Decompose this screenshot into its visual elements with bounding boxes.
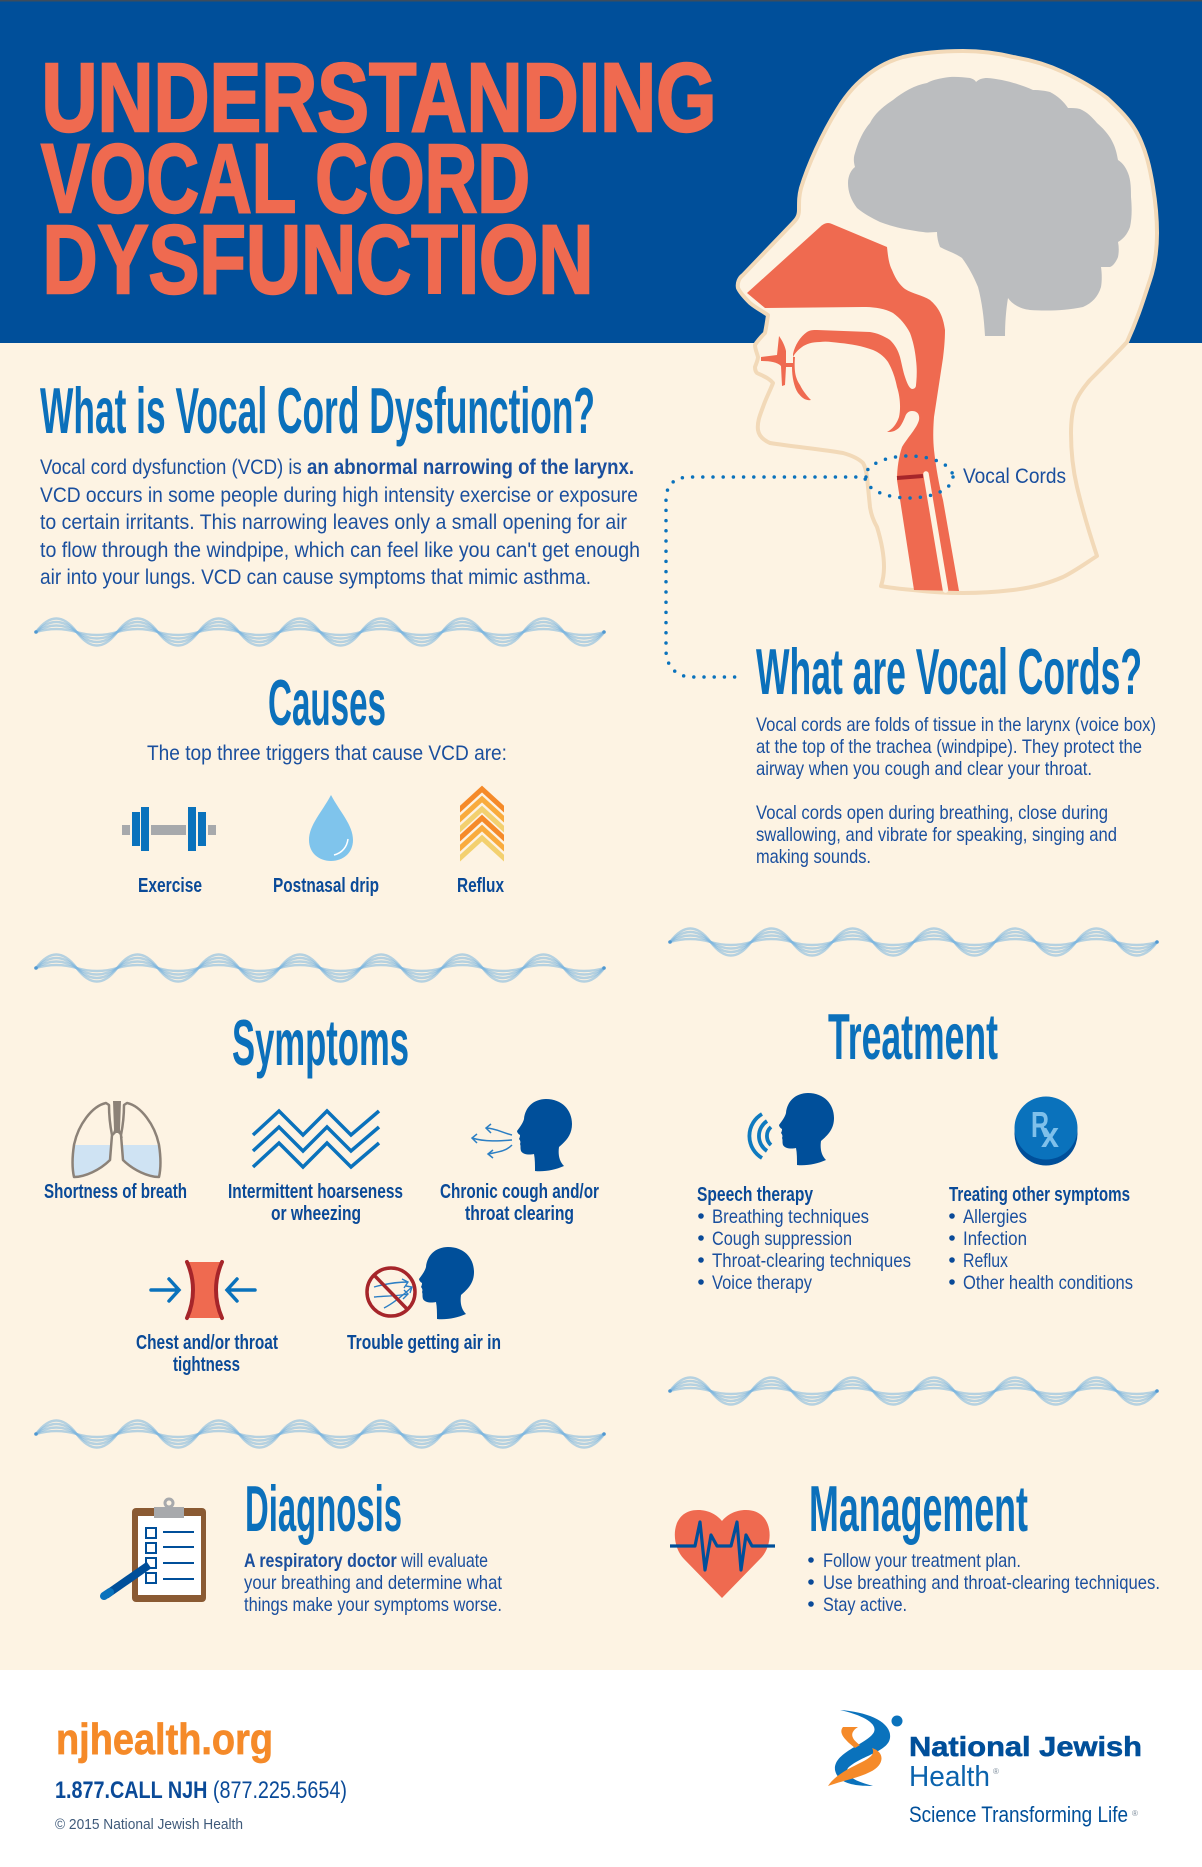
- label: chest tightness: tightness: [173, 1354, 240, 1376]
- paragraph: Vocal cord dysfunction (VCD) is an abnormal narrowing of the larynx.: [40, 456, 634, 479]
- list: speech therapy: Voice therapy: [712, 1272, 812, 1294]
- panel: symptoms: [44, 1006, 599, 1376]
- text: things make your symptoms worse.: [244, 1594, 502, 1616]
- paragraph 1: [756, 714, 1156, 780]
- paragraph 2: making sounds.: [756, 846, 871, 868]
- phone: 1.877.CALL NJH (877.225.5654): [55, 1777, 347, 1804]
- paragraph 2: Vocal cords open during breathing, close during: [756, 802, 1108, 824]
- icon: drop: [309, 795, 353, 861]
- label: hoarseness: [228, 1181, 403, 1225]
- list: treating other symptoms: Infection: [963, 1228, 1027, 1250]
- label: reflux: Reflux: [457, 875, 504, 897]
- teeth and jaw: [761, 336, 811, 400]
- text: your breathing and determine what: [244, 1572, 502, 1594]
- logo: National Jewish Health: ®: [1132, 1809, 1138, 1818]
- list: treating other symptoms: Treating other symptoms: [949, 1184, 1130, 1206]
- panel: what are vocal cords: [756, 635, 1156, 868]
- heading: Causes: [268, 666, 386, 739]
- icon: rx pill: x: [1041, 1114, 1059, 1155]
- list: speech therapy: Cough suppression: [712, 1228, 852, 1250]
- paragraph: VCD occurs in some people during high intensity exercise or exposure: [40, 484, 638, 507]
- dotted connector: [666, 477, 866, 677]
- dotted highlight: [865, 456, 953, 498]
- icon: clipboard: [104, 1499, 206, 1602]
- title: [41, 43, 716, 314]
- label: exercise: Exercise: [138, 875, 202, 897]
- paragraph 1: at the top of the trachea (windpipe). They protect the: [756, 736, 1142, 758]
- paragraph: air into your lungs. VCD can cause symptoms that mimic asthma.: [40, 566, 591, 589]
- paragraph 2: [756, 802, 1117, 868]
- list: treating other symptoms: Allergies: [963, 1206, 1027, 1228]
- label: vocal cords: Vocal Cords: [963, 465, 1066, 488]
- heading: Management: [809, 1472, 1028, 1545]
- icon: rx pill: [1014, 1096, 1078, 1166]
- icon: zigzag waves: [253, 1111, 379, 1167]
- list: treating other symptoms: Reflux: [963, 1250, 1008, 1272]
- panel: what is VCD: [40, 374, 640, 589]
- vocal cord band: [897, 476, 923, 478]
- list: speech therapy: Throat-clearing techniques: [712, 1250, 911, 1272]
- logo: National Jewish Health: Science Transforming Life: [909, 1802, 1128, 1827]
- panel: diagnosis: [104, 1472, 502, 1616]
- panel: management: [670, 1472, 1160, 1616]
- logo: National Jewish Health: National Jewish: [909, 1731, 1142, 1762]
- panel: treatment: [697, 1000, 1133, 1294]
- footer: contact: [55, 1715, 347, 1833]
- label: hoarseness: or wheezing: [271, 1203, 361, 1225]
- paragraph: [40, 456, 640, 589]
- list: Stay active.: [823, 1594, 907, 1616]
- list: Follow your treatment plan.: [823, 1550, 1021, 1572]
- icon: speaking head: [749, 1093, 834, 1165]
- list: treating other symptoms: [949, 1184, 1133, 1294]
- heading: Diagnosis: [245, 1472, 402, 1545]
- header band: [0, 0, 1202, 343]
- paragraph: to flow through the windpipe, which can feel like you can't get enough: [40, 539, 640, 562]
- list: [808, 1550, 1160, 1616]
- copyright: © 2015 National Jewish Health: [55, 1816, 243, 1833]
- title: UNDERSTANDING: [42, 43, 716, 152]
- title: DYSFUNCTION: [42, 205, 594, 314]
- esophagus strip: [926, 474, 946, 590]
- heading: Symptoms: [232, 1006, 409, 1079]
- website: njhealth.org: [56, 1715, 273, 1764]
- logo: National Jewish Health: [828, 1710, 1142, 1827]
- list: treating other symptoms: Other health conditions: [963, 1272, 1133, 1294]
- icon: heart with pulse: [670, 1510, 775, 1598]
- icon: chest tightness: [151, 1262, 255, 1318]
- icon: coughing head: [472, 1099, 572, 1171]
- heading: Treatment: [828, 1000, 998, 1073]
- paragraph: to certain irritants. This narrowing leaves only a small opening for air: [40, 511, 627, 534]
- logo: National Jewish Health: Health: [909, 1761, 990, 1793]
- label: chronic cough: throat clearing: [465, 1203, 574, 1225]
- paragraph 1: airway when you cough and clear your throat.: [756, 758, 1092, 780]
- label: chronic cough: Chronic cough and/or: [440, 1181, 599, 1203]
- head outline: [738, 51, 1157, 593]
- list: speech therapy: Breathing techniques: [712, 1206, 869, 1228]
- footer background: [0, 1670, 1202, 1867]
- label: shortness of breath: Shortness of breath: [44, 1181, 187, 1203]
- airway: [747, 223, 959, 591]
- label: chronic cough: [440, 1181, 599, 1225]
- label: postnasal drip: Postnasal drip: [273, 875, 379, 897]
- label: hoarseness: Intermittent hoarseness: [228, 1181, 403, 1203]
- logo: National Jewish Health: ®: [993, 1767, 999, 1776]
- text: A respiratory doctor will evaluate: [244, 1550, 488, 1572]
- illustration: head cross-section: [738, 51, 1157, 593]
- label: chest tightness: Chest and/or throat: [136, 1332, 278, 1354]
- list: speech therapy: [697, 1184, 911, 1294]
- label: chest tightness: [136, 1332, 278, 1376]
- icon: rx pill: R: [1031, 1104, 1049, 1145]
- title: VOCAL CORD: [41, 124, 530, 233]
- icon: lungs: [72, 1101, 160, 1177]
- brain: [848, 77, 1132, 336]
- panel: causes: [122, 666, 507, 897]
- paragraph 2: swallowing, and vibrate for speaking, singing and: [756, 824, 1117, 846]
- label: trouble getting air: Trouble getting air in: [347, 1332, 501, 1354]
- icon: no air: [367, 1247, 474, 1319]
- text: [244, 1550, 502, 1616]
- icon: dumbbell: [122, 807, 216, 851]
- list: speech therapy: Speech therapy: [697, 1184, 814, 1206]
- icon: reflux chevrons: [458, 789, 506, 860]
- intro text: The top three triggers that cause VCD are:: [147, 742, 507, 765]
- heading: What is Vocal Cord Dysfunction?: [40, 374, 595, 447]
- icon: helix: [828, 1710, 902, 1786]
